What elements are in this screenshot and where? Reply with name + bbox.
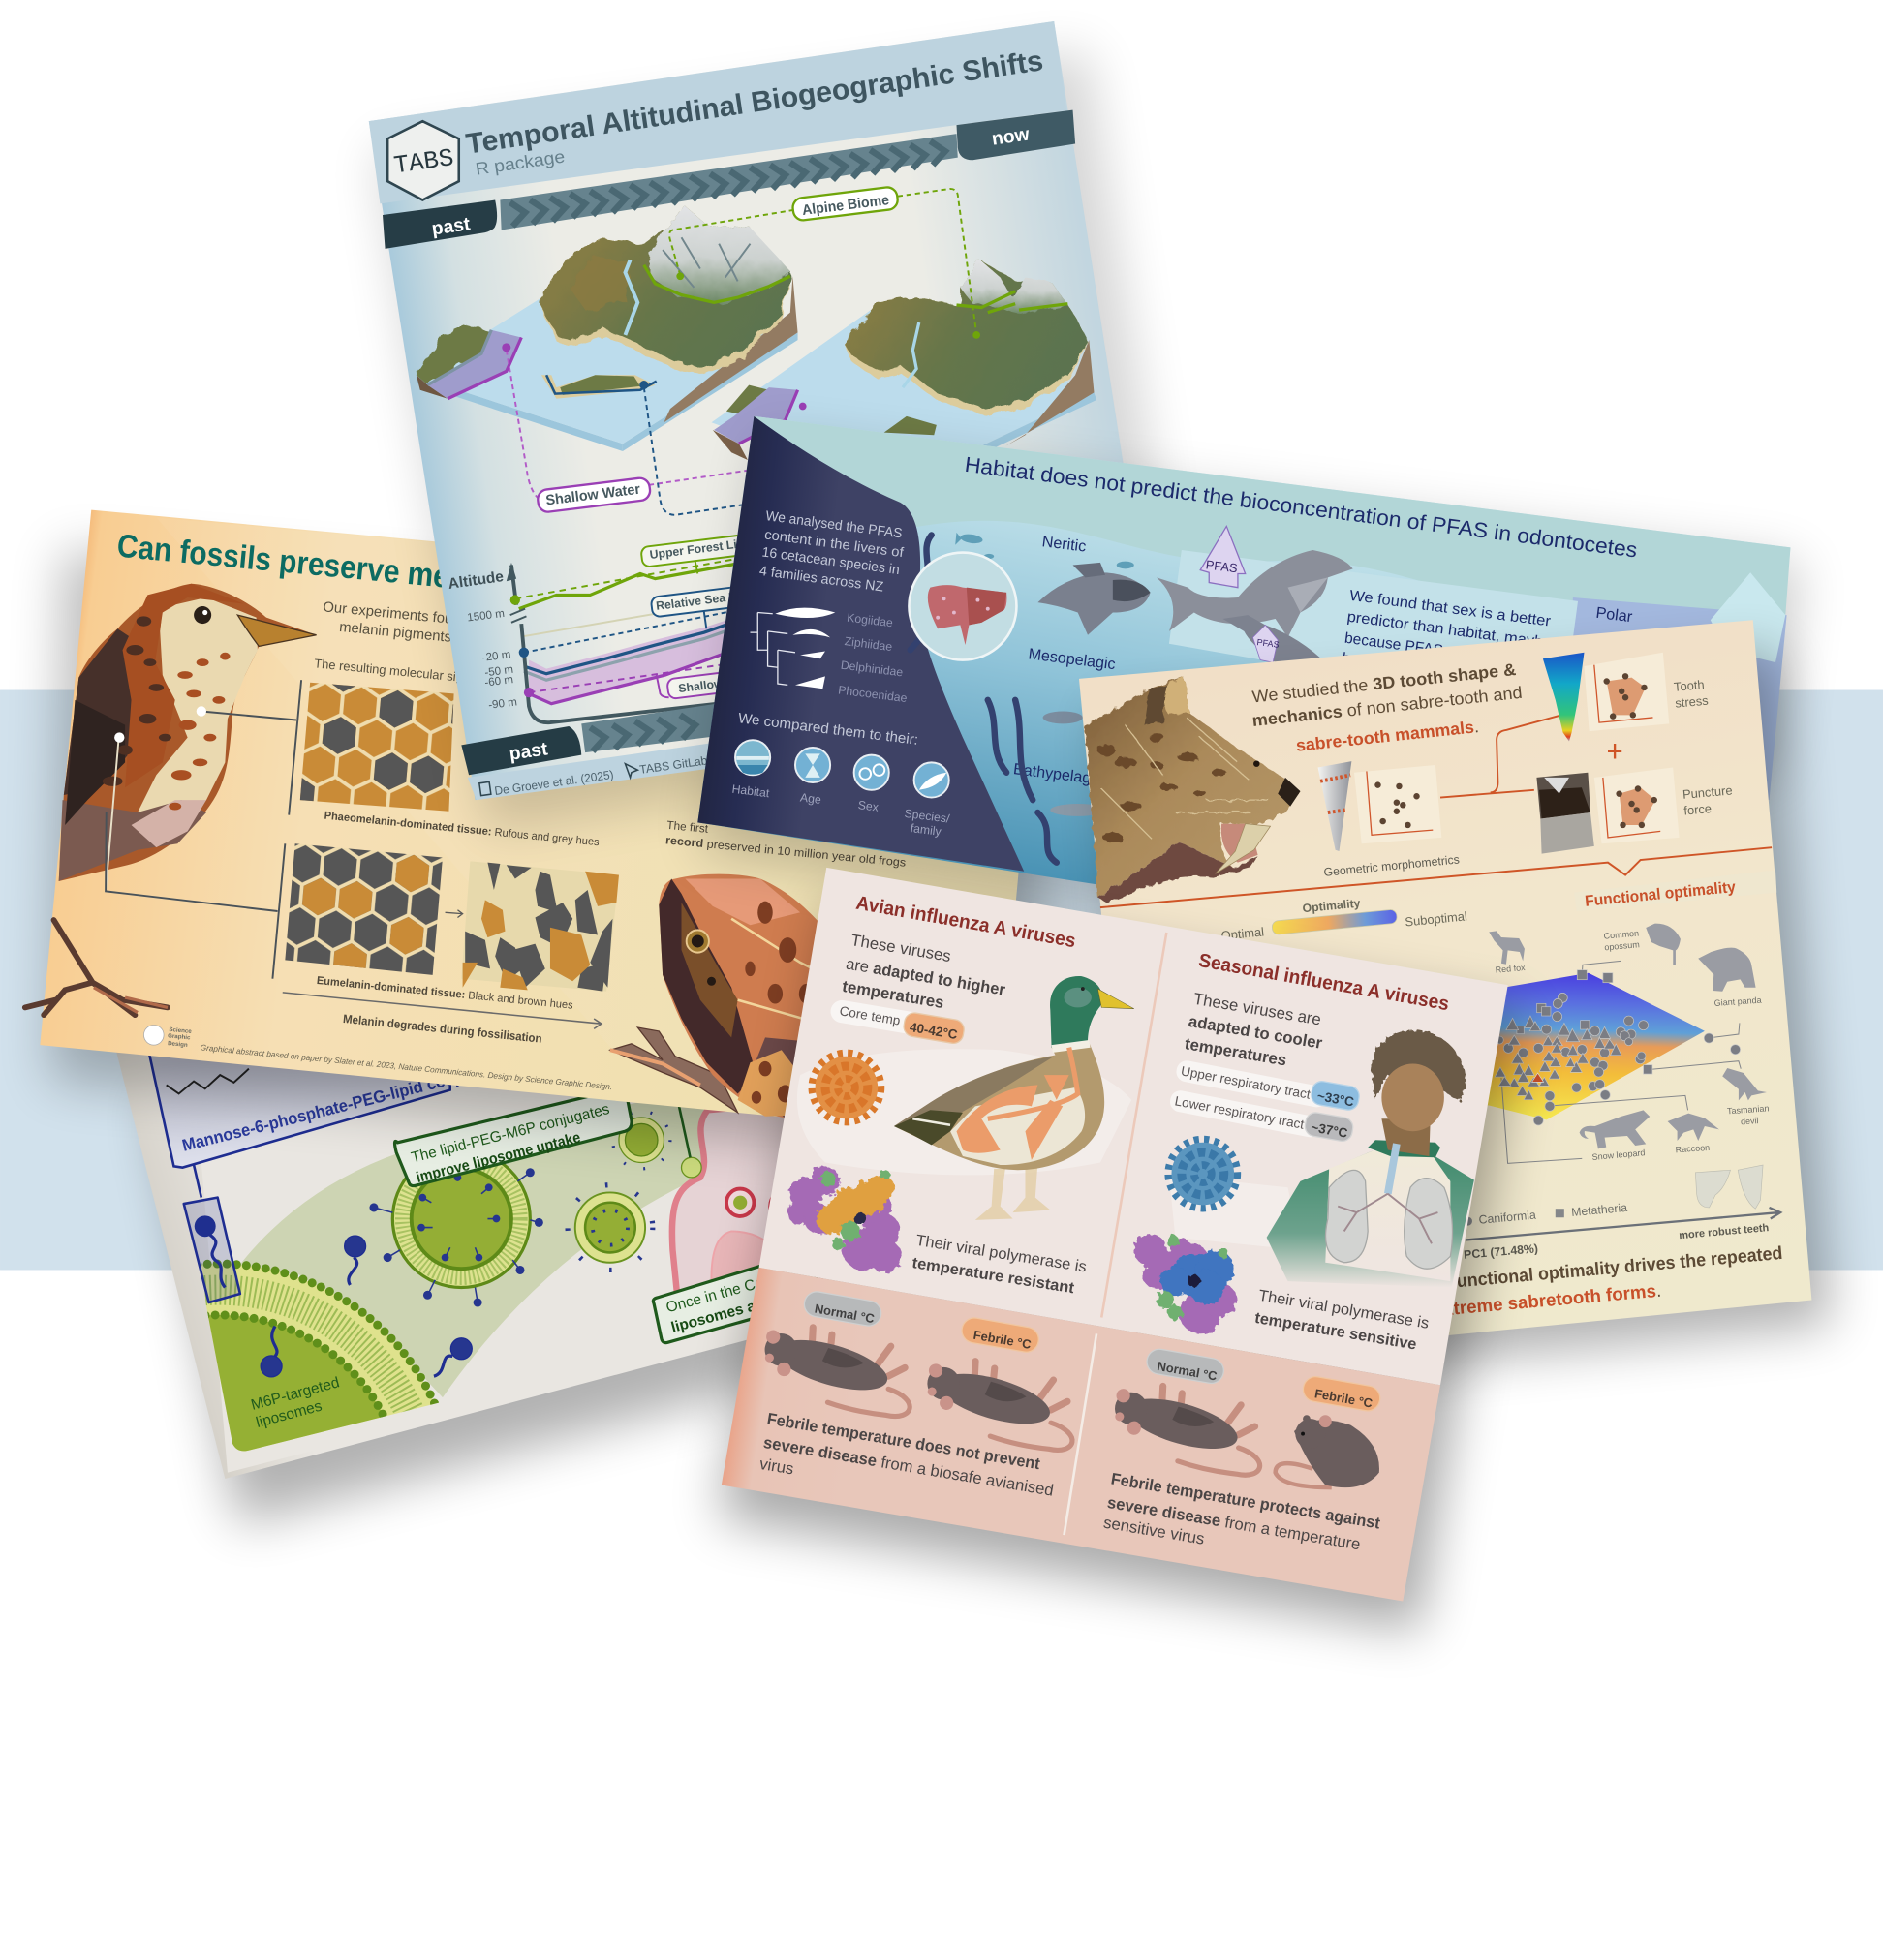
- timeline: bottom: [581, 691, 807, 752]
- illustration: liver: [909, 553, 1016, 660]
- credit line: Graphical abstract based on paper by Slater et al. 2023, Nature Communications. Design by Science Graphic Design.: [200, 1042, 613, 1091]
- model: avian polymerase: [787, 1166, 902, 1272]
- heading: avian: Avian influenza A viruses: [854, 893, 1077, 952]
- panel: melanin in fossils: [25, 510, 1063, 1162]
- illustration: sabre-tooth cat: [1085, 678, 1300, 903]
- connector: sea level: [639, 381, 751, 515]
- connector: wing tissue: [106, 732, 285, 979]
- tab: now: now: [991, 123, 1032, 150]
- arrow: melanin degrades: [283, 993, 602, 1028]
- text: analysis summary: 4 families across NZ: [758, 564, 884, 596]
- axis: PC1: PC1 (71.48%): [1464, 1241, 1538, 1262]
- icon: PFAS arrow large: PFAS: [1205, 557, 1239, 575]
- text: seasonal outcome: Febrile temperature protects against: [1110, 1469, 1382, 1533]
- pill: upper respiratory tract: [1175, 1059, 1361, 1112]
- pill: febrile right: [1301, 1375, 1382, 1413]
- panel: PFAS in odontocetes: [697, 416, 1801, 975]
- pill: normal left: [802, 1290, 883, 1328]
- text: avian outcome: virus: [758, 1455, 795, 1478]
- logo: Science Graphic Design: Graphic: [168, 1032, 191, 1041]
- label: Relative Sea Level: Relative Sea Level: [655, 587, 759, 613]
- photo: puncture test: [1536, 773, 1594, 854]
- conclusion: extreme sabretooth forms.: [1433, 1280, 1662, 1320]
- text: avian adaptation: [841, 931, 1007, 1012]
- morphospace: puncture force: [1594, 768, 1680, 843]
- label: functional optimality: Functional optimality: [1584, 878, 1737, 910]
- chart: altitude timeline: -60 m: [484, 673, 514, 689]
- label: Alpine Biome: Alpine Biome: [801, 193, 890, 219]
- tab: now: [956, 110, 1075, 160]
- pill: lower respiratory tract: ~37°C: [1310, 1119, 1349, 1141]
- link: TABS GitLab: TABS GitLab: [638, 753, 708, 777]
- pill: normal left: Normal °C: [814, 1302, 876, 1326]
- connectors: orange: [1440, 715, 1561, 798]
- pill: febrile left: [960, 1316, 1040, 1354]
- pill: normal right: [1145, 1347, 1225, 1386]
- shallow water band: [529, 612, 751, 704]
- mouse: infected at normal temperature: [756, 1320, 920, 1420]
- callout: once in the cell: liposomes are: [669, 1294, 771, 1336]
- chart: altitude timeline: -50 m: [484, 663, 514, 679]
- illustration: small dolphin: PFAS: [1256, 637, 1280, 650]
- logo: TABS hexagon: TABS: [392, 144, 455, 180]
- text: seasonal adaptation: These viruses are: [1192, 990, 1322, 1028]
- text box: sex predictor: predictor than habitat, maybe: [1346, 609, 1553, 652]
- callout: once in the cell: Once in the Cell: [664, 1272, 772, 1316]
- backdrop swooshes: [797, 1049, 1131, 1175]
- illustration: porpoise: [1037, 563, 1151, 635]
- mouse: healthy at febrile temperature: [1276, 1415, 1379, 1487]
- subtitle: R package: [475, 146, 566, 179]
- label: tooth stress: Tooth: [1673, 677, 1705, 694]
- connector: breast tissue: [197, 680, 301, 815]
- tab: past: [383, 200, 497, 249]
- melanosome grid: eumelanin: [285, 843, 443, 975]
- icon: cursor: [625, 764, 637, 778]
- band: surface water: [754, 416, 1790, 615]
- panel: influenza A viruses: [719, 868, 1519, 1632]
- phylogeny with cetacean families: [751, 608, 908, 705]
- heading: seasonal: Seasonal influenza A viruses: [1197, 950, 1451, 1015]
- label: Upper Forest Line: [640, 535, 752, 573]
- pill: core temp: [829, 998, 966, 1045]
- mouse: infected at febrile temperature: [919, 1354, 1083, 1454]
- icon: blue virus: [1169, 1140, 1237, 1208]
- text box: sex predictor: by gestation: [1342, 650, 1423, 677]
- label: M6P-targeted liposomes: [249, 1374, 341, 1431]
- arrow: degradation step: [446, 910, 463, 917]
- animal labels: Tasmanian: [1727, 1103, 1770, 1116]
- pill: lower respiratory tract: [1168, 1089, 1354, 1143]
- caption: melanin degrades: Melanin degrades during fossilisation: [342, 1012, 542, 1046]
- panel: sabre-tooth optimality: [1079, 620, 1832, 1388]
- connector: shallow water: [502, 343, 807, 503]
- animal labels: Giant panda: [1713, 995, 1762, 1008]
- axis: PC1: more robust teeth: [1679, 1222, 1770, 1241]
- animal labels: Snow leopard: [1591, 1148, 1646, 1162]
- label: Shallow Water: [537, 477, 651, 513]
- label: functional optimality: [1574, 870, 1776, 911]
- label: puncture force: [1682, 782, 1733, 818]
- axis: PC1: [1464, 1208, 1780, 1262]
- text: polymerase resistant: Their viral polymerase is: [914, 1232, 1088, 1275]
- text: analysis summary: content in the livers of: [763, 527, 905, 561]
- icon: habitat: Habitat: [731, 782, 771, 800]
- silhouette: snow leopard: [1580, 1110, 1650, 1148]
- text: seasonal outcome: sensitive virus: [1102, 1514, 1206, 1548]
- text: study summary: mechanics of non sabre-tooth and: [1251, 683, 1523, 730]
- kelp: [911, 535, 1057, 863]
- zone: polar: [1569, 597, 1787, 800]
- pill: upper respiratory tract: Upper respiratory tract: [1180, 1063, 1312, 1102]
- text: experiments: melanin pigments: [338, 620, 452, 646]
- icon: species: [904, 762, 951, 839]
- text: analysis summary: [758, 508, 905, 596]
- animal labels: Red fox: [1495, 963, 1526, 975]
- phylogeny with cetacean families: Delphinidae: [840, 658, 904, 679]
- text: frog fossil note: record preserved in 10 million year old frogs: [664, 833, 907, 870]
- icon: orange virus: [813, 1054, 880, 1121]
- label: M6P-targeted liposomes: M6P-targeted: [249, 1374, 341, 1414]
- heading: Can fossils preserve melanin?: [115, 529, 536, 603]
- header band: [369, 21, 1066, 203]
- silhouette: Tasmanian devil: [1722, 1068, 1767, 1100]
- text: frog fossil note: [664, 818, 907, 870]
- label: M6P-targeted liposomes: liposomes: [255, 1397, 324, 1431]
- zone labels: Neritic: [1041, 533, 1087, 556]
- text: experiments: [314, 599, 480, 686]
- illustration: bird: [25, 584, 317, 1015]
- chart: altitude timeline: Altitude: [448, 568, 505, 593]
- illustration: mallard duck: [894, 976, 1134, 1220]
- lipid-PEG inset box: [184, 1165, 240, 1302]
- caption: eumelanin: Eumelanin-dominated tissue: Black and brown hues: [316, 975, 573, 1012]
- terrain block: now: [711, 260, 1096, 496]
- legend: optimality scale: Optimal: [1220, 924, 1265, 943]
- label: Shallow Water (chart): Shallow Water: [678, 672, 759, 695]
- label: Alpine Biome: [791, 186, 899, 222]
- background colour band: [0, 690, 1883, 1270]
- icon: age: Age: [799, 790, 822, 807]
- legend: optimality scale: Optimality: [1302, 897, 1361, 915]
- text: frog fossil note: The first: [666, 818, 709, 836]
- tooth: morphometrics: [1318, 761, 1351, 851]
- icon: habitat: [731, 740, 771, 800]
- animal labels: Raccoon: [1675, 1143, 1710, 1154]
- panel: liposome graphical abstract: [116, 1052, 823, 1545]
- label: puncture force: force: [1683, 801, 1713, 818]
- title: Habitat does not predict the bioconcentration of PFAS in odontocetes: [964, 452, 1639, 562]
- morphospace: tooth stress: [1584, 653, 1669, 731]
- phylogeny with cetacean families: Ziphiidae: [844, 634, 893, 654]
- legend: clades: Caniformia: [1478, 1209, 1537, 1227]
- footer strip: [468, 738, 800, 800]
- caption: geometric morphometrics: Geometric morphometrics: [1323, 852, 1460, 879]
- icon: species: Species/: [904, 807, 951, 826]
- icon: PFAS arrow large: [1200, 526, 1246, 588]
- label: Shallow Water (chart): [657, 669, 759, 699]
- text: polymerase sensitive: temperature sensitive: [1253, 1309, 1418, 1354]
- divider: bottom: [1064, 1333, 1096, 1535]
- label: tooth stress: [1673, 677, 1709, 711]
- swoosh: liposome path: [237, 1100, 751, 1397]
- text: polymerase resistant: temperature resistant: [911, 1254, 1076, 1297]
- title: Temporal Altitudinal Biogeographic Shifts: [464, 45, 1045, 161]
- text: analysis summary: 16 cetacean species in: [761, 545, 901, 578]
- panel: TABS temporal altitudinal biogeographic shifts: [369, 21, 1188, 831]
- text: avian outcome: severe disease from a biosafe avianised: [762, 1433, 1055, 1500]
- silhouette: red fox: [1489, 931, 1525, 965]
- icon: document: [479, 781, 491, 796]
- zone labels: [1012, 533, 1634, 788]
- label: tooth stress: stress: [1675, 693, 1709, 711]
- silhouette: raccoon: [1668, 1114, 1719, 1141]
- pill: febrile right: Febrile °C: [1313, 1386, 1374, 1411]
- text: comparison: We compared them to their:: [737, 711, 919, 749]
- phylogeny with cetacean families: Phocoenidae: [837, 683, 908, 705]
- text: study summary: sabre-tooth mammals.: [1295, 717, 1480, 755]
- illustration: small dolphin: [1222, 615, 1328, 665]
- text: seasonal outcome: severe disease from a temperature: [1106, 1493, 1362, 1553]
- title box: mannose conjugate: [138, 1000, 503, 1168]
- legend: clades: Metatheria: [1571, 1201, 1628, 1219]
- animal labels: Common: [1603, 929, 1639, 941]
- chevrons: bottom timeline: [590, 715, 695, 751]
- caption: phaeomelanin: Phaeomelanin-dominated tissue: Rufous and grey hues: [324, 811, 600, 848]
- text: avian adaptation: temperatures: [841, 977, 945, 1012]
- text box: sex predictor: We found that sex is a better: [1348, 588, 1552, 629]
- legend: optimality scale: Suboptimal: [1405, 908, 1467, 929]
- animal labels: devil: [1741, 1116, 1759, 1126]
- text: polymerase resistant: [911, 1232, 1088, 1297]
- zone labels: Polar: [1595, 604, 1634, 626]
- icon: age: [795, 748, 830, 807]
- legend: clades: [1464, 1201, 1628, 1227]
- chart: optimality landscape: [1472, 924, 1770, 1163]
- dark sidebar: [697, 416, 1024, 872]
- liposome: central: [369, 1150, 543, 1307]
- divider line with notch: [1100, 847, 1772, 907]
- text: experiments: Our experiments found: [323, 599, 469, 628]
- text: study summary: [1251, 659, 1523, 755]
- illustration: person with lungs: [1267, 1030, 1474, 1288]
- icon: species: family: [910, 821, 942, 839]
- melanosome grid: degraded: [461, 861, 619, 992]
- tab: past: past: [430, 213, 472, 240]
- label: Upper Forest Line: Upper Forest Line: [649, 536, 752, 562]
- label: Shallow Water: Shallow Water: [545, 482, 641, 508]
- text: experiments: The resulting molecular signal: [314, 656, 480, 686]
- illustration: frog: [610, 874, 831, 1118]
- label: Relative Sea Level: [651, 585, 759, 628]
- phylogeny with cetacean families: Kogiidae: [847, 611, 894, 629]
- legend: optimality scale: [1220, 897, 1467, 943]
- timeline: top: [500, 134, 958, 230]
- callout: once in the cell: [653, 1250, 819, 1343]
- title box: mannose conjugate: Mannose-6-phosphate-PEG-lipid conjugate: [180, 1057, 503, 1155]
- terrain block: past: [417, 205, 798, 451]
- divider: top: [1101, 933, 1166, 1318]
- icon: sex: Sex: [857, 798, 880, 814]
- tooth: stress map: [1543, 653, 1584, 741]
- pill: core temp: 40-42°C: [909, 1020, 959, 1042]
- text: study summary: We studied the 3D tooth shape &: [1251, 659, 1517, 706]
- mouse: seasonal at normal temperature: [1106, 1378, 1271, 1479]
- model: seasonal polymerase: [1134, 1234, 1237, 1333]
- zone labels: Bathypelagic: [1012, 760, 1103, 788]
- logo: Science Graphic Design: [143, 1025, 193, 1049]
- conclusion: [1433, 1242, 1783, 1320]
- scatter: morphometrics: [1354, 765, 1441, 843]
- illustration: dolphin: [1157, 550, 1353, 637]
- large liposome membrane: [201, 1259, 439, 1451]
- silhouette: common opossum: [1646, 924, 1681, 965]
- animal labels: opossum: [1604, 939, 1640, 952]
- text: seasonal adaptation: adapted to cooler: [1188, 1012, 1324, 1053]
- logo: Science Graphic Design: Science: [169, 1026, 193, 1035]
- chart: altitude timeline: 1500 m: [467, 607, 506, 625]
- model: teeth: [1695, 1165, 1763, 1209]
- animal labels: [1495, 929, 1770, 1162]
- pill: normal right: Normal °C: [1156, 1359, 1219, 1384]
- liposome: small: [613, 1112, 670, 1169]
- text: avian adaptation: are adapted to higher: [845, 955, 1007, 999]
- pill: upper respiratory tract: ~33°C: [1316, 1088, 1355, 1110]
- text: seasonal adaptation: temperatures: [1184, 1034, 1288, 1069]
- pill: febrile left: Febrile °C: [972, 1328, 1033, 1352]
- tab: past (bottom): past: [508, 738, 549, 765]
- chart: altitude timeline: -90 m: [488, 695, 518, 712]
- logo: TABS hexagon: [387, 121, 459, 200]
- text: avian adaptation: These viruses: [849, 931, 952, 965]
- chart: altitude timeline: -20 m: [481, 648, 511, 664]
- silhouette: giant panda: [1698, 948, 1756, 992]
- conclusion: Functional optimality drives the repeated: [1445, 1242, 1783, 1292]
- callout: lipid-PEG-M6P conjugates: The lipid-PEG-M6P conjugates: [410, 1101, 611, 1166]
- illustration: fish: [955, 533, 1134, 816]
- label: puncture force: Puncture: [1682, 782, 1733, 802]
- text box: sex predictor: [1169, 550, 1578, 713]
- text box: sex predictor: because PFAS are transferred: [1343, 630, 1546, 672]
- plus sign: [1608, 744, 1621, 759]
- M6P lollipop markers: [261, 1236, 472, 1377]
- text: analysis summary: We analysed the PFAS: [764, 508, 903, 541]
- text: seasonal adaptation: [1184, 990, 1324, 1069]
- pill: lower respiratory tract: Lower respiratory tract: [1174, 1093, 1306, 1132]
- liposome: medium: [568, 1185, 653, 1270]
- chart: altitude timeline: [448, 535, 759, 722]
- icon: sex: [854, 755, 889, 814]
- tab: past (bottom): [461, 726, 581, 775]
- text: polymerase sensitive: Their viral polymerase is: [1257, 1287, 1431, 1332]
- melanosome grid: phaeomelanin: [300, 682, 454, 812]
- connector: alpine biome: [669, 189, 980, 339]
- pill: core temp: Core temp: [839, 1003, 902, 1028]
- citation: De Groeve: De Groeve et al. (2025): [494, 768, 614, 798]
- callout: lipid-PEG-M6P conjugates: [395, 1087, 632, 1186]
- iceberg: [1711, 572, 1785, 662]
- logo: Science Graphic Design: Design: [168, 1040, 188, 1049]
- callout: lipid-PEG-M6P conjugates: improve liposome uptake: [415, 1129, 583, 1186]
- cell with membrane: [672, 1100, 825, 1300]
- text: avian outcome: Febrile temperature does not prevent: [766, 1409, 1042, 1473]
- zone labels: Mesopelagic: [1028, 645, 1117, 673]
- text: polymerase sensitive: [1253, 1287, 1431, 1354]
